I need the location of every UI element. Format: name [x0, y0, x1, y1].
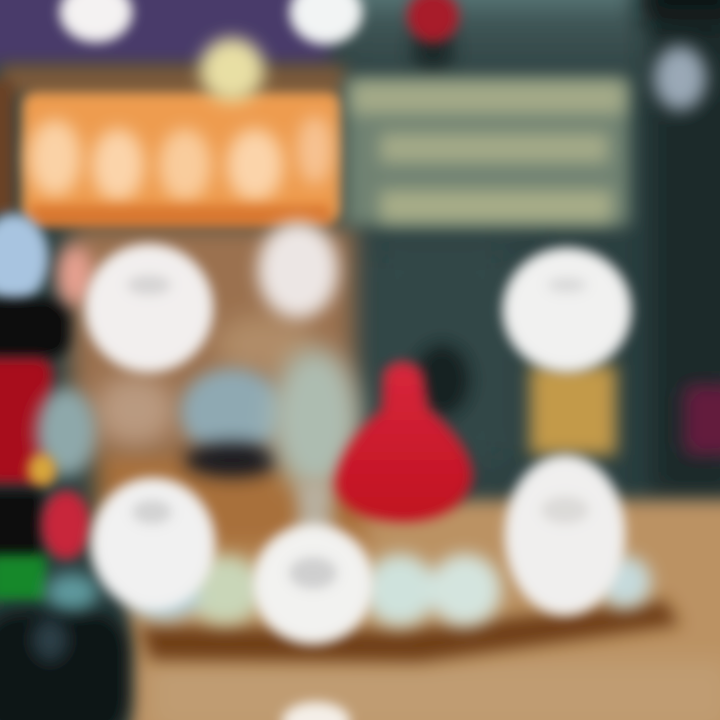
row of pale ornaments: [131, 554, 651, 626]
upper center white ornament: [258, 222, 338, 318]
pale glass ornament: [271, 348, 359, 492]
brown strip under banner: [0, 65, 345, 95]
right maroon object: [684, 385, 720, 455]
white circle: top left: [57, 244, 213, 372]
title block: [345, 78, 630, 226]
top white circle left: [60, 0, 132, 42]
left yellow dot: [28, 454, 56, 486]
left brown edge: [0, 80, 14, 215]
left green block: [0, 555, 46, 600]
vertical pale stem: [298, 480, 332, 540]
table tray shadow: [140, 600, 680, 662]
left pale ornament: [36, 388, 96, 476]
top lamp: yellow: [200, 38, 264, 102]
white circle: bottom left: [91, 478, 215, 610]
orange lit panel: [22, 92, 342, 225]
top red ornament: [407, 0, 459, 74]
left black hat: [0, 298, 70, 358]
bottom left dark object: [0, 574, 130, 720]
left black column: [0, 490, 42, 565]
red ornament: [334, 344, 472, 522]
left red body: [0, 358, 52, 483]
gold cylinder: [530, 365, 616, 455]
top right pale ornament: [654, 46, 706, 110]
top white circle center: [290, 0, 362, 44]
white circle: top right: [503, 248, 631, 372]
wooden table: [95, 440, 720, 720]
left red ball: [42, 491, 90, 559]
bottom white glow: [282, 702, 350, 720]
white circle: bottom center: [253, 524, 373, 644]
white circle: bottom right: [505, 455, 625, 615]
left blue shape: [0, 214, 48, 302]
brown middle background: [70, 225, 355, 455]
center blue-grey ornament: [180, 368, 284, 478]
purple top banner: [0, 0, 330, 65]
